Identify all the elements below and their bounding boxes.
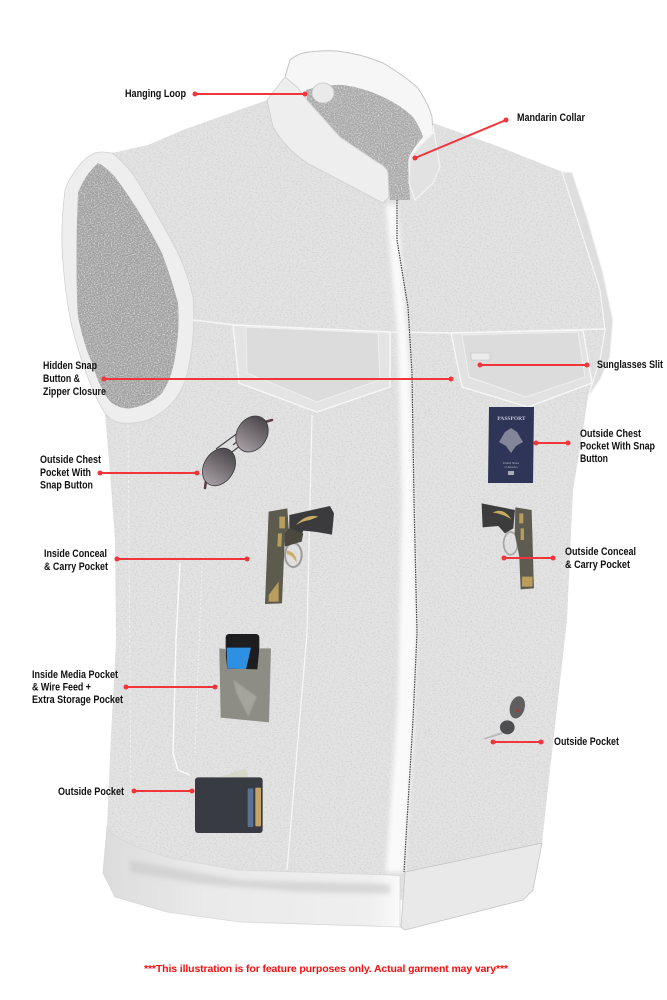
icon: passport: of America	[504, 465, 518, 469]
callout: Sunglasses Slit	[478, 359, 663, 371]
callout: Inside Conceal & Carry Pocket: Inside Conceal	[44, 548, 107, 560]
callout: Outside Chest Pocket left: Pocket With	[40, 467, 91, 479]
right armhole edge	[562, 172, 613, 397]
callout: Inside Media Pocket: Inside Media Pocket	[32, 669, 118, 681]
left chest pocket flap	[233, 325, 390, 412]
callout: Outside Chest Pocket left: Outside Chest	[40, 454, 101, 466]
callout: Hidden Snap Button & Zipper Closure: Button &	[43, 373, 80, 385]
bottom hem left	[103, 827, 400, 927]
callout: Outside Chest Pocket right: Outside Chest	[580, 428, 641, 440]
collar lining	[306, 85, 423, 200]
collar front right	[409, 125, 440, 200]
bottom hem right	[401, 843, 542, 930]
icon: passport: United States	[503, 461, 520, 465]
eagle emblem	[499, 428, 523, 453]
callout: Inside Media Pocket: Extra Storage Pocket	[32, 694, 123, 706]
callout: Hanging Loop	[125, 88, 308, 100]
vest body	[95, 80, 613, 900]
footer disclaimer: ***This illustration is for feature purposes only. Actual garment may vary***	[144, 963, 509, 975]
yoke seam	[193, 320, 606, 333]
callout: Outside Chest Pocket right: Button	[580, 453, 608, 465]
callout: Outside Chest Pocket right	[534, 428, 655, 465]
icon: right pistol	[482, 503, 534, 589]
callout: Inside Conceal & Carry Pocket	[44, 548, 250, 573]
callout: Hidden Snap Button & Zipper Closure: Hidden Snap	[43, 360, 97, 372]
callout: Inside Media Pocket: & Wire Feed +	[32, 682, 91, 694]
centre placket highlight	[386, 205, 417, 872]
armhole trim	[62, 152, 194, 423]
callout: Mandarin Collar	[412, 112, 586, 160]
icon: passport: PASSPORT	[497, 416, 526, 422]
callout: Outside Pocket left	[58, 786, 194, 798]
collar back inner	[285, 51, 433, 157]
zipper	[397, 200, 417, 872]
callout: Outside Chest Pocket left	[40, 454, 200, 492]
collar front left	[267, 77, 389, 203]
callout: Outside Pocket right	[490, 736, 619, 748]
icon: sunglasses	[196, 410, 275, 492]
callout: Outside Chest Pocket left: Snap Button	[40, 480, 93, 492]
icon: passport	[488, 407, 534, 483]
icon: left pistol	[265, 506, 334, 604]
callout: Outside Pocket right: Outside Pocket	[554, 736, 619, 748]
callout: Hanging Loop: Hanging Loop	[125, 88, 186, 100]
callout: Inside Media Pocket	[32, 669, 218, 706]
stitch lines	[128, 415, 312, 870]
right chest pocket flap	[451, 330, 592, 407]
callout: Outside Conceal & Carry Pocket: Outside Conceal	[565, 546, 636, 558]
vest illustration	[62, 51, 613, 930]
callout: Hidden Snap Button & Zipper Closure	[43, 360, 454, 398]
hem shading	[130, 860, 390, 894]
callout: Inside Conceal & Carry Pocket: & Carry Pocket	[44, 561, 108, 573]
hanging loop	[312, 83, 334, 103]
callout: Outside Conceal & Carry Pocket: & Carry Pocket	[565, 559, 630, 571]
icon: media pocket with phone	[219, 634, 271, 722]
icon: car keys	[483, 694, 527, 739]
callout: Mandarin Collar: Mandarin Collar	[517, 112, 586, 124]
icon: wallet	[195, 769, 263, 833]
armhole lining	[76, 163, 179, 408]
callout: Outside Conceal & Carry Pocket	[502, 546, 636, 571]
callout: Outside Pocket left: Outside Pocket	[58, 786, 124, 798]
callout: Hidden Snap Button & Zipper Closure: Zipper Closure	[43, 386, 106, 398]
sunglasses slit	[471, 353, 490, 360]
